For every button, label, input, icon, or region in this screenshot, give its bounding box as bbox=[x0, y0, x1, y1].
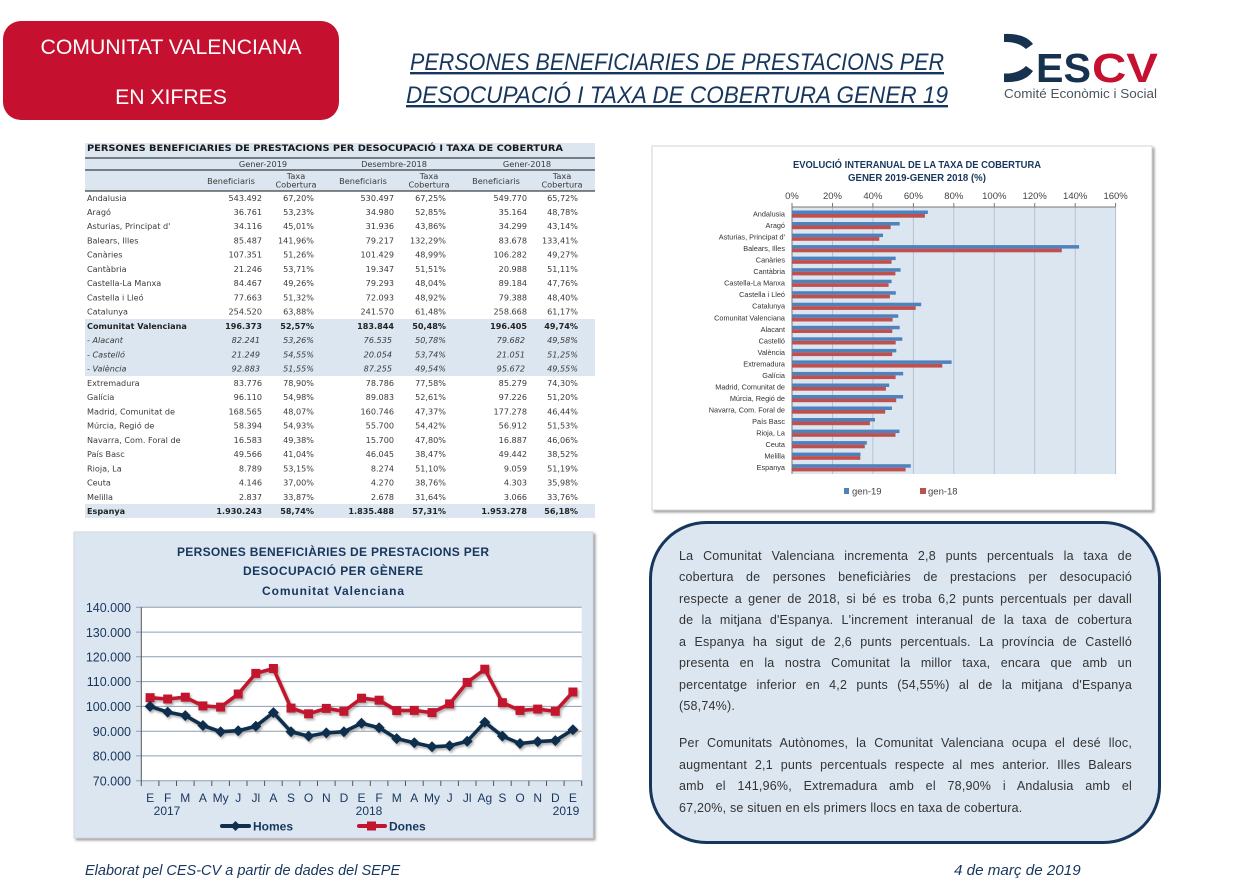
line chart x axis labels bbox=[146, 791, 580, 818]
bar chart bars and category labels: Comunitat Valenciana bbox=[714, 313, 786, 322]
line chart x axis labels: J bbox=[447, 791, 453, 805]
bar chart bars and category labels bbox=[709, 210, 1079, 472]
line chart x axis labels: A bbox=[199, 791, 207, 805]
bar chart top axis: 160% bbox=[1103, 191, 1128, 202]
line chart x axis labels: N bbox=[533, 791, 542, 805]
line chart y axis labels: 100.000 bbox=[86, 700, 131, 714]
table body rows: Extremadura bbox=[87, 378, 140, 388]
table body rows: 79.217 bbox=[366, 236, 394, 246]
bar chart top axis: 120% bbox=[1023, 191, 1047, 202]
table body rows: 47,80% bbox=[415, 435, 446, 445]
table body rows: 85.279 bbox=[499, 378, 527, 388]
table body rows: 54,93% bbox=[283, 420, 314, 430]
table body rows: 35,98% bbox=[547, 478, 578, 488]
line series: Dones bbox=[150, 668, 573, 714]
table body rows: 549.770 bbox=[494, 193, 527, 203]
table body rows: 48,40% bbox=[547, 292, 578, 302]
line chart y axis labels bbox=[86, 601, 131, 788]
bar chart bars and category labels: València bbox=[758, 348, 786, 357]
table body rows: 52,61% bbox=[415, 392, 446, 402]
table body rows: 107.351 bbox=[229, 250, 262, 260]
table body rows: 49.442 bbox=[499, 449, 527, 459]
table body rows: 53,74% bbox=[415, 350, 446, 360]
bar chart top axis: 80% bbox=[944, 191, 964, 202]
table body rows: 46.045 bbox=[366, 449, 394, 459]
table body rows: 50,78% bbox=[415, 335, 446, 345]
table body rows: Andalusia bbox=[87, 193, 127, 203]
table body rows: 4.270 bbox=[371, 478, 394, 488]
line chart x axis labels: N bbox=[322, 791, 331, 805]
bar chart bars and category labels: Andalusia bbox=[753, 210, 786, 218]
line chart x axis labels: S bbox=[498, 791, 506, 805]
table body rows: 177.278 bbox=[494, 406, 527, 416]
bar chart top axis: 100% bbox=[982, 191, 1007, 202]
line chart x axis labels: A bbox=[269, 791, 277, 805]
line chart y axis labels: 80.000 bbox=[93, 750, 131, 764]
main title: DESOCUPACIÓ I TAXA DE COBERTURA GENER 19 bbox=[406, 82, 948, 109]
line chart x axis labels: M bbox=[180, 791, 190, 805]
commentary text: La Comunitat Valenciana incrementa 2,8 punts percentuals la taxa de bbox=[679, 549, 1132, 563]
panel: bar chart coverage rate bbox=[652, 146, 1152, 510]
footer date: 4 de març de 2019 bbox=[954, 862, 1081, 879]
footer source: Elaborat pel CES-CV a partir de dades del SEPE bbox=[85, 863, 400, 879]
table body rows: 49,27% bbox=[547, 250, 578, 260]
table body rows: 41,04% bbox=[283, 449, 314, 459]
table body rows: 49,54% bbox=[415, 364, 446, 374]
table body rows: Castella-La Manxa bbox=[87, 278, 161, 288]
commentary text: presenta en la nostra Comunitat la millor taxa, encara que amb un bbox=[679, 656, 1132, 670]
table body rows: 21.246 bbox=[234, 264, 262, 274]
table column headers: Gener-2018 bbox=[503, 159, 551, 169]
table body rows: 52,57% bbox=[280, 321, 314, 331]
table column headers: Gener-2019 bbox=[239, 159, 287, 169]
main title bbox=[406, 49, 948, 109]
table body rows: 49,26% bbox=[283, 278, 314, 288]
line chart x axis labels: E bbox=[569, 791, 577, 805]
table body rows: 79.293 bbox=[366, 278, 394, 288]
bar chart bars and category labels: Asturias, Principat d' bbox=[719, 233, 786, 242]
table body rows: 85.487 bbox=[234, 236, 262, 246]
table body rows: 21.249 bbox=[232, 350, 260, 360]
line chart y axis labels: 90.000 bbox=[93, 725, 131, 739]
table body rows: Balears, Illes bbox=[87, 236, 138, 246]
table body rows: 9.059 bbox=[504, 464, 527, 474]
table body rows: 56.912 bbox=[499, 420, 527, 430]
table column headers: Taxa bbox=[552, 171, 571, 181]
table body rows: 4.146 bbox=[239, 478, 262, 488]
table body rows: Ceuta bbox=[87, 478, 111, 488]
table body rows: 54,98% bbox=[283, 392, 314, 402]
line chart x axis labels: 2017 bbox=[154, 804, 181, 818]
table body rows: 51,55% bbox=[283, 364, 314, 374]
header badge text: EN XIFRES bbox=[115, 86, 227, 109]
table body rows: 43,86% bbox=[415, 221, 446, 231]
table body rows: 35.164 bbox=[499, 207, 527, 217]
line chart x axis labels: E bbox=[357, 791, 366, 805]
bar chart bars and category labels: Ceuta bbox=[766, 440, 786, 449]
line chart y axis labels: 130.000 bbox=[86, 626, 131, 640]
line chart title: PERSONES BENEFICIÀRIES DE PRESTACIONS PER bbox=[177, 544, 489, 559]
table body rows: 20.988 bbox=[499, 264, 527, 274]
table body rows: 78.786 bbox=[366, 378, 394, 388]
table body rows: 92.883 bbox=[232, 364, 260, 374]
header badge text bbox=[41, 36, 302, 109]
table body rows: 82.241 bbox=[232, 335, 260, 345]
logo: CESCV: CV bbox=[1092, 45, 1159, 91]
table column headers: Beneficiaris bbox=[339, 176, 387, 186]
table body rows: 51,20% bbox=[547, 392, 578, 402]
line chart x axis labels: O bbox=[304, 791, 313, 805]
table body rows: Galícia bbox=[87, 392, 114, 402]
table body rows: 53,26% bbox=[283, 335, 314, 345]
line chart x axis labels: My bbox=[213, 791, 229, 805]
table body rows bbox=[87, 193, 578, 516]
table body rows: Catalunya bbox=[87, 306, 128, 316]
line chart legend: Homes bbox=[253, 820, 293, 834]
header badge text: COMUNITAT VALENCIANA bbox=[41, 36, 301, 59]
table body rows: 47,37% bbox=[415, 406, 446, 416]
table body rows: 38,47% bbox=[415, 449, 446, 459]
bar chart bars and category labels: Catalunya bbox=[752, 302, 786, 311]
bar chart bars and category labels: Cantàbria bbox=[753, 267, 786, 276]
line chart x axis labels: Jl bbox=[251, 791, 260, 805]
table body rows: 196.373 bbox=[225, 321, 262, 331]
table body rows: 530.497 bbox=[361, 193, 394, 203]
header badge background bbox=[3, 21, 339, 120]
line chart title: DESOCUPACIÓ PER GÈNERE bbox=[243, 563, 423, 578]
line chart title bbox=[177, 544, 489, 598]
table body rows: 241.570 bbox=[361, 306, 394, 316]
bar chart title: GENER 2019-GENER 2018 (%) bbox=[848, 173, 986, 184]
table body rows: Espanya bbox=[87, 506, 125, 516]
table body rows: 58.394 bbox=[234, 420, 262, 430]
table body rows: 141,96% bbox=[278, 236, 314, 246]
commentary text: Per Comunitats Autònomes, la Comunitat Valenciana ocupa el desé lloc, bbox=[679, 736, 1132, 750]
line chart x axis labels: 2019 bbox=[553, 804, 580, 818]
commentary text: a Espanya ha sigut de 2,6 punts percentuals. La província de Castelló bbox=[679, 635, 1132, 649]
table body rows: 168.565 bbox=[229, 406, 262, 416]
table body rows: 77.663 bbox=[234, 292, 262, 302]
table title: PERSONES BENEFICIARIES DE PRESTACIONS PER DESOCUPACIÓ I TAXA DE COBERTURA bbox=[87, 142, 563, 154]
line chart y axis labels: 120.000 bbox=[86, 650, 131, 664]
commentary text: augmentant 2,1 punts percentuals respecte al mes anterior. Illes Balears bbox=[679, 758, 1132, 772]
table body rows: 34.299 bbox=[499, 221, 527, 231]
bar chart bars and category labels: Navarra, Com. Foral de bbox=[709, 406, 785, 414]
table body rows: 196.405 bbox=[490, 321, 527, 331]
table body rows: País Basc bbox=[87, 449, 125, 459]
table body rows: 96.110 bbox=[234, 392, 262, 402]
table column headers: Cobertura bbox=[408, 180, 450, 190]
table body rows: 58,74% bbox=[280, 506, 314, 516]
table body rows: 78,90% bbox=[283, 378, 314, 388]
bar chart bars and category labels: Madrid, Comunitat de bbox=[715, 382, 785, 392]
table body rows: 4.303 bbox=[504, 478, 527, 488]
bar chart top axis bbox=[785, 191, 1128, 474]
table body rows: 83.678 bbox=[499, 236, 527, 246]
panel: data table bbox=[85, 142, 595, 518]
table body rows: 79.388 bbox=[499, 292, 527, 302]
table body rows: 89.184 bbox=[499, 278, 527, 288]
table body rows: 61,48% bbox=[415, 306, 446, 316]
table body rows: 51,51% bbox=[415, 264, 446, 274]
line chart y axis labels: 70.000 bbox=[93, 774, 131, 788]
table body rows: 47,76% bbox=[547, 278, 578, 288]
bar chart bars and category labels: Espanya bbox=[757, 463, 786, 472]
commentary text: (58,74%). bbox=[679, 699, 735, 713]
table body rows: 49,58% bbox=[547, 335, 578, 345]
table body rows: 46,06% bbox=[547, 435, 578, 445]
table body rows: Cantàbria bbox=[87, 264, 127, 274]
table body rows: - Alacant bbox=[87, 335, 124, 345]
line series: Homes bbox=[150, 706, 573, 747]
bar chart bars and category labels: Múrcia, Regió de bbox=[730, 394, 785, 403]
table body rows: 57,31% bbox=[412, 506, 446, 516]
bar chart legend: gen-18 bbox=[928, 486, 958, 498]
table body rows: 48,07% bbox=[283, 406, 314, 416]
table body rows: 49,55% bbox=[547, 364, 578, 374]
bar chart top axis: 0% bbox=[785, 191, 799, 202]
line chart legend: Dones bbox=[389, 820, 426, 834]
bar chart bars and category labels: Alacant bbox=[761, 325, 785, 334]
main title: PERSONES BENEFICIARIES DE PRESTACIONS PER bbox=[410, 49, 944, 76]
line chart y axis labels: 140.000 bbox=[86, 601, 131, 615]
bar chart bars and category labels: Castella-La Manxa bbox=[724, 279, 786, 288]
table body rows: 48,99% bbox=[415, 250, 446, 260]
table body rows: 16.887 bbox=[499, 435, 527, 445]
table column headers: Taxa bbox=[419, 171, 438, 181]
line chart y axis labels: 110.000 bbox=[87, 675, 131, 689]
table body rows: 51,11% bbox=[547, 264, 578, 274]
logo: CESCV: Comité Econòmic i Social bbox=[1004, 86, 1157, 101]
commentary text: percentatge inferior en 4,2 punts (54,55%) al de la mitjana d'Espanya bbox=[679, 678, 1132, 692]
table column headers: Beneficiaris bbox=[207, 176, 255, 186]
table body rows: 16.583 bbox=[234, 435, 262, 445]
table column headers: Desembre-2018 bbox=[361, 159, 427, 169]
table column headers: Cobertura bbox=[541, 180, 583, 190]
table body rows: 133,41% bbox=[542, 236, 578, 246]
table body rows: Aragó bbox=[87, 207, 111, 217]
table body rows: 49,38% bbox=[283, 435, 314, 445]
table body rows: 33,87% bbox=[283, 492, 314, 502]
table body rows: 8.789 bbox=[239, 464, 262, 474]
table body rows: Madrid, Comunitat de bbox=[87, 406, 175, 416]
table body rows: 63,88% bbox=[283, 306, 314, 316]
table body rows: 46,44% bbox=[547, 406, 578, 416]
table body rows: 51,10% bbox=[415, 464, 446, 474]
table body rows: 543.492 bbox=[229, 193, 262, 203]
table body rows: 1.930.243 bbox=[216, 506, 262, 516]
table body rows: 55.700 bbox=[366, 420, 394, 430]
table body rows: 258.668 bbox=[494, 306, 527, 316]
table body rows: 49,74% bbox=[544, 321, 578, 331]
table body rows: Comunitat Valenciana bbox=[87, 321, 187, 331]
table body rows: 51,25% bbox=[547, 350, 578, 360]
line chart title: Comunitat Valenciana bbox=[262, 584, 404, 598]
table body rows: Asturias, Principat d' bbox=[87, 221, 170, 231]
table body rows: 31,64% bbox=[415, 492, 446, 502]
table body rows: 48,92% bbox=[415, 292, 446, 302]
table body rows: 50,48% bbox=[412, 321, 446, 331]
bar chart bars and category labels: Galícia bbox=[762, 371, 786, 380]
table body rows: 31.936 bbox=[366, 221, 394, 231]
table body rows: 53,71% bbox=[283, 264, 314, 274]
table body rows: 106.282 bbox=[494, 250, 527, 260]
table body rows: 1.835.488 bbox=[348, 506, 394, 516]
line chart x axis labels: O bbox=[515, 791, 525, 805]
logo: CESCV: ES bbox=[1036, 45, 1091, 91]
table body rows: 20.054 bbox=[364, 350, 392, 360]
table body rows: 101.429 bbox=[361, 250, 394, 260]
logo: CESCV bbox=[1004, 34, 1159, 101]
table body rows: 49.566 bbox=[234, 449, 262, 459]
line chart x axis labels: A bbox=[410, 791, 418, 805]
commentary box background bbox=[650, 522, 1160, 842]
table column headers: Cobertura bbox=[275, 180, 317, 190]
table body rows: Melilla bbox=[87, 492, 113, 502]
table body rows: 53,15% bbox=[283, 464, 314, 474]
line chart x axis labels: Jl bbox=[463, 791, 472, 805]
table body rows: - Castelló bbox=[87, 350, 125, 360]
table body rows: 51,19% bbox=[547, 464, 578, 474]
line chart x axis labels: M bbox=[392, 791, 402, 805]
table body rows: 15.700 bbox=[366, 435, 394, 445]
table body rows: 67,20% bbox=[283, 193, 314, 203]
line chart x axis labels: Ag bbox=[477, 791, 492, 805]
line chart x axis labels: E bbox=[146, 791, 154, 805]
table body rows: 2.837 bbox=[239, 492, 262, 502]
table body rows: 51,26% bbox=[283, 250, 314, 260]
table body rows: 38,52% bbox=[547, 449, 578, 459]
commentary text: 67,20%, se situen en els primers llocs en taxa de cobertura. bbox=[679, 801, 1022, 815]
bar chart bars and category labels: Extremadura bbox=[743, 359, 786, 368]
table body rows: 19.347 bbox=[366, 264, 394, 274]
bar chart bars and category labels: Melilla bbox=[764, 452, 786, 461]
table body rows: 45,01% bbox=[283, 221, 314, 231]
table body rows: 72.093 bbox=[366, 292, 394, 302]
table body rows: 3.066 bbox=[504, 492, 527, 502]
bar chart bars and category labels: País Basc bbox=[752, 417, 785, 426]
table body rows: 34.980 bbox=[366, 207, 394, 217]
table body rows: 183.844 bbox=[357, 321, 394, 331]
bar chart title bbox=[793, 158, 1041, 184]
bar chart top axis: 40% bbox=[863, 191, 883, 202]
table body rows: 77,58% bbox=[415, 378, 446, 388]
panel: line chart beneficiaries by gender bbox=[74, 532, 593, 838]
bar chart top axis: 140% bbox=[1063, 191, 1088, 202]
bar chart bars and category labels: Rioja, La bbox=[756, 429, 786, 438]
table body rows: 36.761 bbox=[234, 207, 262, 217]
table body rows: 54,42% bbox=[415, 420, 446, 430]
table body rows: 95.672 bbox=[497, 364, 525, 374]
table body rows: 84.467 bbox=[234, 278, 262, 288]
table body rows: 8.274 bbox=[371, 464, 394, 474]
table body rows: - València bbox=[87, 364, 127, 374]
line chart legend bbox=[220, 820, 426, 834]
table body rows: 1.953.278 bbox=[481, 506, 527, 516]
table body rows: 83.776 bbox=[234, 378, 262, 388]
table body rows: 132,29% bbox=[410, 236, 446, 246]
commentary text: amb el 141,96%, Extremadura amb el 78,90% i Andalusia amb el bbox=[679, 779, 1132, 793]
table body rows: Canàries bbox=[87, 250, 122, 260]
table body rows: Múrcia, Regió de bbox=[87, 420, 154, 430]
table body rows: 34.116 bbox=[234, 221, 262, 231]
line chart plot area bbox=[136, 607, 582, 786]
table body rows: Castella i Lleó bbox=[87, 292, 144, 302]
table body rows: 65,72% bbox=[547, 193, 578, 203]
bar chart top axis: 60% bbox=[904, 191, 923, 202]
table column headers: Beneficiaris bbox=[472, 176, 520, 186]
table body rows: 160.746 bbox=[361, 406, 394, 416]
table column headers bbox=[207, 159, 583, 190]
table body rows: 2.678 bbox=[371, 492, 394, 502]
commentary text: de la mitjana d'Espanya. L'increment interanual de la taxa de cobertura bbox=[679, 613, 1132, 627]
table body rows: 76.535 bbox=[364, 335, 392, 345]
table body rows: 43,14% bbox=[547, 221, 578, 231]
bar chart legend bbox=[844, 486, 958, 498]
bar chart legend: gen-19 bbox=[852, 486, 882, 498]
line chart x axis labels: F bbox=[164, 791, 171, 805]
bar chart bars and category labels: Castelló bbox=[759, 336, 785, 345]
table body rows: 254.520 bbox=[229, 306, 262, 316]
table body rows: 52,85% bbox=[415, 207, 446, 217]
table body rows: 51,53% bbox=[547, 420, 578, 430]
bar chart top axis: 20% bbox=[823, 191, 843, 202]
table body rows: 51,32% bbox=[283, 292, 314, 302]
bar chart bars and category labels: Canàries bbox=[756, 256, 785, 265]
line chart x axis labels: S bbox=[287, 791, 295, 805]
commentary text: respecte a gener de 2018, si bé es troba 6,2 punts percentuals per davall bbox=[679, 592, 1132, 606]
table body rows: 97.226 bbox=[499, 392, 527, 402]
table body rows: 79.682 bbox=[497, 335, 525, 345]
table body rows: 33,76% bbox=[547, 492, 578, 502]
table body rows: 89.083 bbox=[366, 392, 394, 402]
table body rows: 56,18% bbox=[544, 506, 578, 516]
table body rows: 21.051 bbox=[497, 350, 525, 360]
table body rows: 38,76% bbox=[415, 478, 446, 488]
line chart x axis labels: 2018 bbox=[356, 804, 383, 818]
table body rows: Navarra, Com. Foral de bbox=[87, 435, 181, 445]
bar chart bars and category labels: Castella i Lleó bbox=[739, 290, 785, 299]
bar chart bars and category labels: Aragó bbox=[766, 221, 785, 230]
bar chart title: EVOLUCIÓ INTERANUAL DE LA TAXA DE COBERTURA bbox=[793, 158, 1041, 171]
line chart x axis labels: F bbox=[375, 791, 383, 805]
table body rows: 48,78% bbox=[547, 207, 578, 217]
table body rows: 74,30% bbox=[547, 378, 578, 388]
table body rows: 61,17% bbox=[547, 306, 578, 316]
table body rows: 54,55% bbox=[283, 350, 314, 360]
table body rows: 53,23% bbox=[283, 207, 314, 217]
commentary text: cobertura de persones beneficiàries de prestacions per desocupació bbox=[679, 570, 1132, 584]
line chart x axis labels: J bbox=[235, 791, 241, 805]
table body rows: 87.255 bbox=[364, 364, 392, 374]
bar chart bars and category labels: Balears, Illes bbox=[743, 244, 785, 253]
table column headers: Taxa bbox=[286, 171, 305, 181]
table body rows: 48,04% bbox=[415, 278, 446, 288]
line chart x axis labels: D bbox=[340, 791, 349, 805]
table body rows: Rioja, La bbox=[87, 464, 122, 474]
table body rows: 67,25% bbox=[415, 193, 446, 203]
line chart x axis labels: My bbox=[424, 791, 440, 805]
table body rows: 37,00% bbox=[283, 478, 314, 488]
line chart x axis labels: D bbox=[551, 791, 560, 805]
